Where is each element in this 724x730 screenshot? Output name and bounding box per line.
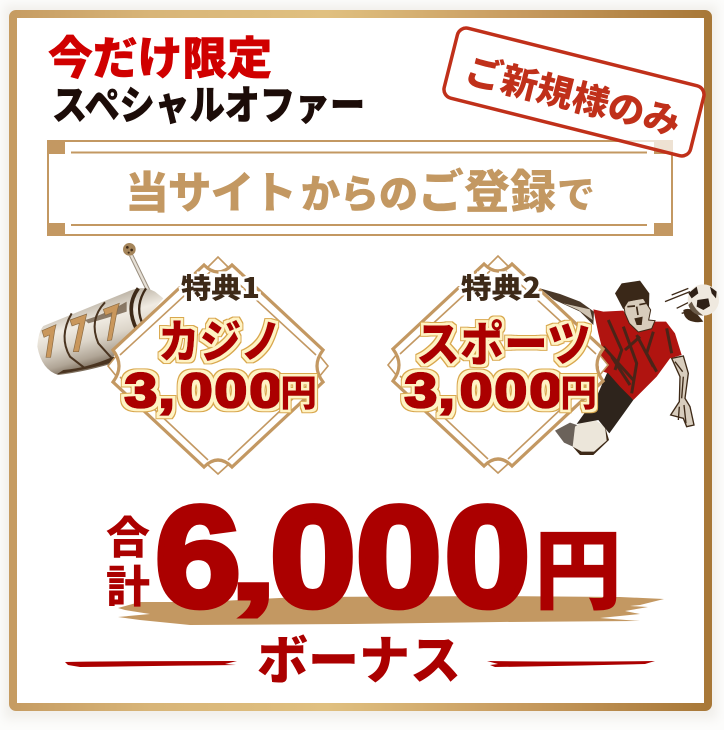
banner text: からの [301, 164, 418, 220]
banner text: で [557, 164, 595, 219]
banner: register via this site [47, 140, 673, 236]
badge heading: スポーツ [416, 305, 591, 375]
rear arm [671, 356, 694, 427]
sevens [42, 325, 56, 357]
shorts [577, 370, 633, 433]
icon: soccer player [540, 281, 719, 455]
stamp: new customers only [442, 26, 706, 158]
yen sign: 円 [534, 501, 622, 628]
diamond frame [113, 265, 323, 467]
total figure: comma: , [224, 495, 282, 625]
hair [615, 281, 649, 309]
yen sign: 円 [280, 363, 317, 417]
stamp text: ご新規様のみ [460, 42, 687, 146]
diamond tips [108, 257, 328, 474]
neck and face [623, 298, 655, 332]
total amount [106, 476, 622, 637]
bonus label [65, 619, 655, 694]
shirt folds [603, 320, 672, 393]
knee and thigh [573, 417, 609, 455]
diamond badge: bonus 2 [388, 256, 608, 473]
ball motion streaks [665, 288, 695, 313]
lower leg [555, 423, 582, 448]
reel shading [85, 302, 127, 323]
badge heading: カジノ [158, 306, 282, 372]
title line: special offer: スペシャルオファー [52, 73, 365, 131]
title [48, 22, 365, 131]
icon: slot machine reels [37, 243, 163, 375]
ball [688, 284, 719, 316]
banner text: ご登録 [418, 156, 556, 222]
banner text: 当サイト [125, 157, 297, 221]
total label: 計 [106, 551, 150, 615]
bonus text: ボーナス [257, 619, 461, 694]
reel body [37, 288, 163, 375]
brush stroke under total [118, 596, 664, 625]
badge amount: 3,000 [405, 365, 562, 418]
diamond tips [388, 256, 608, 473]
reel bands [65, 313, 85, 368]
total label: 合 [106, 502, 150, 566]
badge amount: 3,000 [125, 365, 282, 418]
total figure: six: 6 [155, 476, 241, 637]
diamond badge: bonus 1 [108, 257, 328, 474]
shirt [593, 309, 682, 400]
total figure: zeros: 000 [270, 476, 530, 637]
badge label: 特典2 [461, 267, 541, 307]
lever [131, 255, 150, 294]
yen sign: 円 [560, 363, 597, 417]
front arm [540, 288, 594, 325]
badge label: 特典1 [181, 267, 260, 307]
title line: limited time: 今だけ限定 [48, 22, 272, 87]
diamond frame [393, 264, 603, 466]
